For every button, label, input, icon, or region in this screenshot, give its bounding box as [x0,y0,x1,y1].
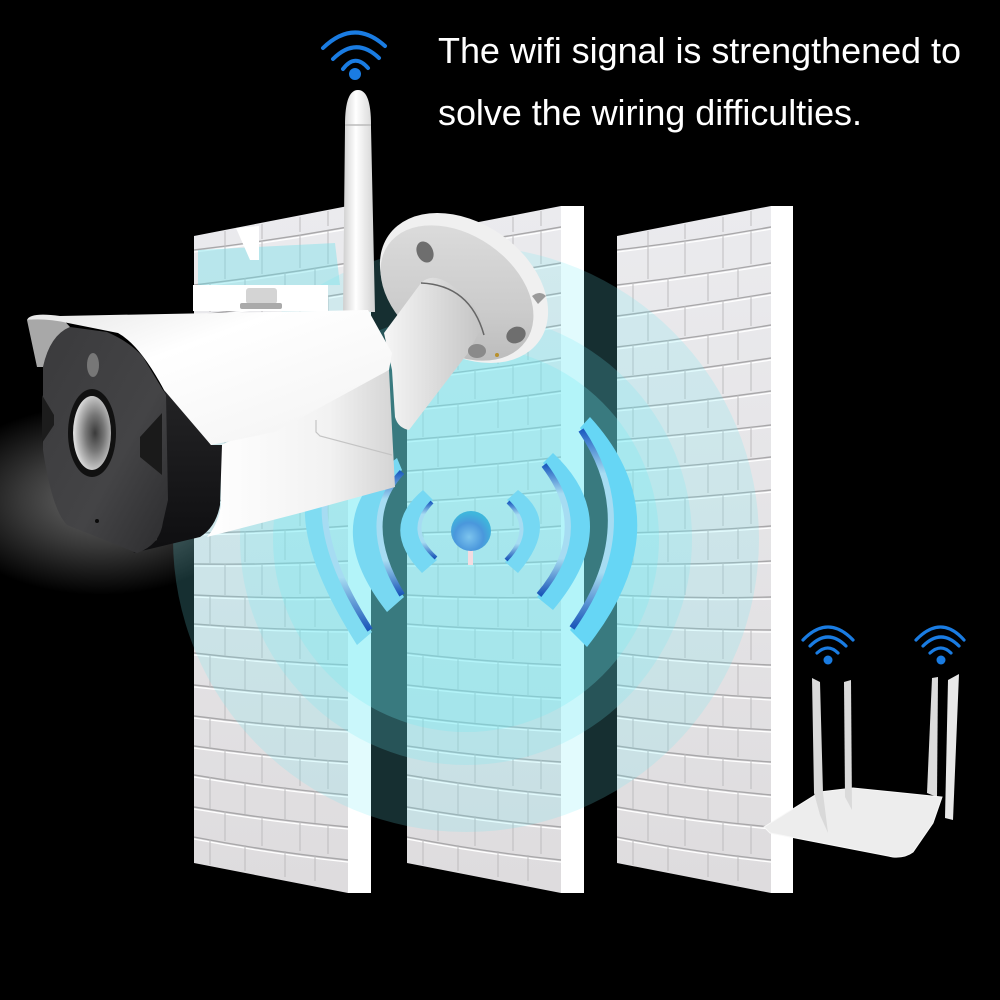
signal arc: middle right [537,453,590,610]
brick wall 1 [194,206,371,893]
arm collar line [421,283,484,335]
cyan patch on wall 1 [198,243,340,286]
white smudges on wall 1 [193,226,328,311]
body panel line [316,420,392,455]
camera antenna [343,90,375,312]
heading text: solve the wiring difficulties. [438,92,862,133]
front dark face [43,327,168,553]
signal arc: outer left [305,440,372,645]
hood inner lip [27,316,70,367]
camera top bolt [240,288,282,309]
glow behind camera [0,405,260,595]
brick wall 3 [617,206,793,893]
infrared LED [468,344,486,358]
mounting plate rim [351,182,577,394]
signal arc: outer right [570,417,637,647]
signal rings [173,246,759,832]
camera body [207,370,395,537]
signal arc: middle left [353,458,404,612]
wifi icon left router antenna [803,627,853,664]
router antenna front right [844,680,852,810]
signal centre dot [451,511,491,565]
wall bracket [351,182,577,430]
plate notch [532,293,546,304]
lens ring [68,389,116,477]
mounting hole bottom [504,324,528,346]
left vent [42,395,54,443]
router [764,674,959,857]
mounting hole top [413,239,437,265]
bracket arm [384,278,482,430]
signal arc: inner right [505,490,540,573]
router antenna front left [812,678,828,833]
microphone dot [95,519,99,523]
heading text [438,30,961,133]
heading text: The wifi signal is strengthened to [438,30,961,71]
amber LED [495,353,499,357]
wifi icon right router antenna [916,627,964,664]
black side panel [133,385,222,553]
right vent [140,413,162,475]
router antenna back left [927,677,938,797]
router base [764,788,942,857]
mounting plate face [355,197,559,389]
security camera [27,288,395,553]
lens glass [73,396,111,470]
hood shell [27,310,392,445]
wifi icon above antenna [323,32,385,80]
router antenna back right [945,674,959,820]
signal arc: inner left [400,490,437,573]
brick wall 2 [407,206,584,893]
light sensor [87,353,99,377]
